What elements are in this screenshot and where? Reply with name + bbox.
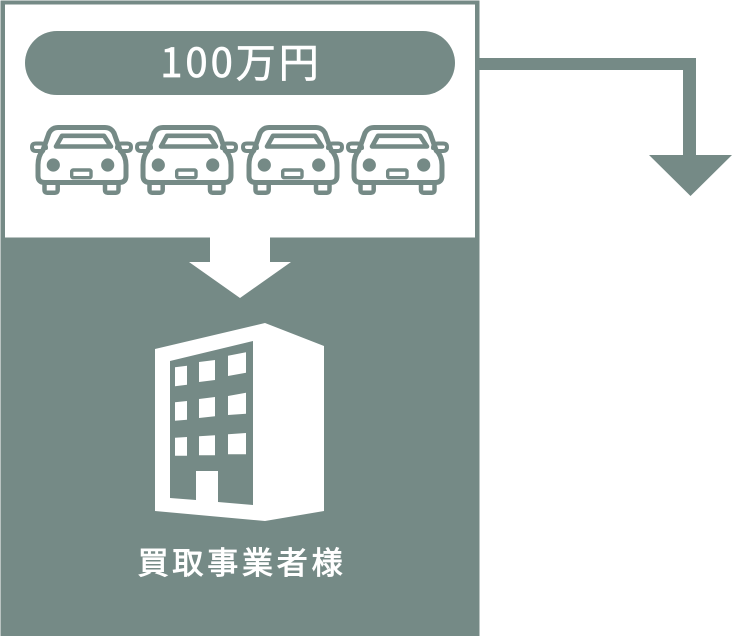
icon: office building (155, 323, 324, 521)
price pill: 100万円 (160, 31, 322, 89)
arrow: right then down (479, 58, 732, 196)
label: buyer: 買取事業者様 (138, 538, 346, 583)
icon: four cars (32, 128, 447, 193)
price pill (25, 31, 455, 95)
panel: buyer background (0, 0, 480, 636)
arrow: down to buyer (189, 237, 291, 298)
panel: white vehicle box (5, 4, 475, 238)
